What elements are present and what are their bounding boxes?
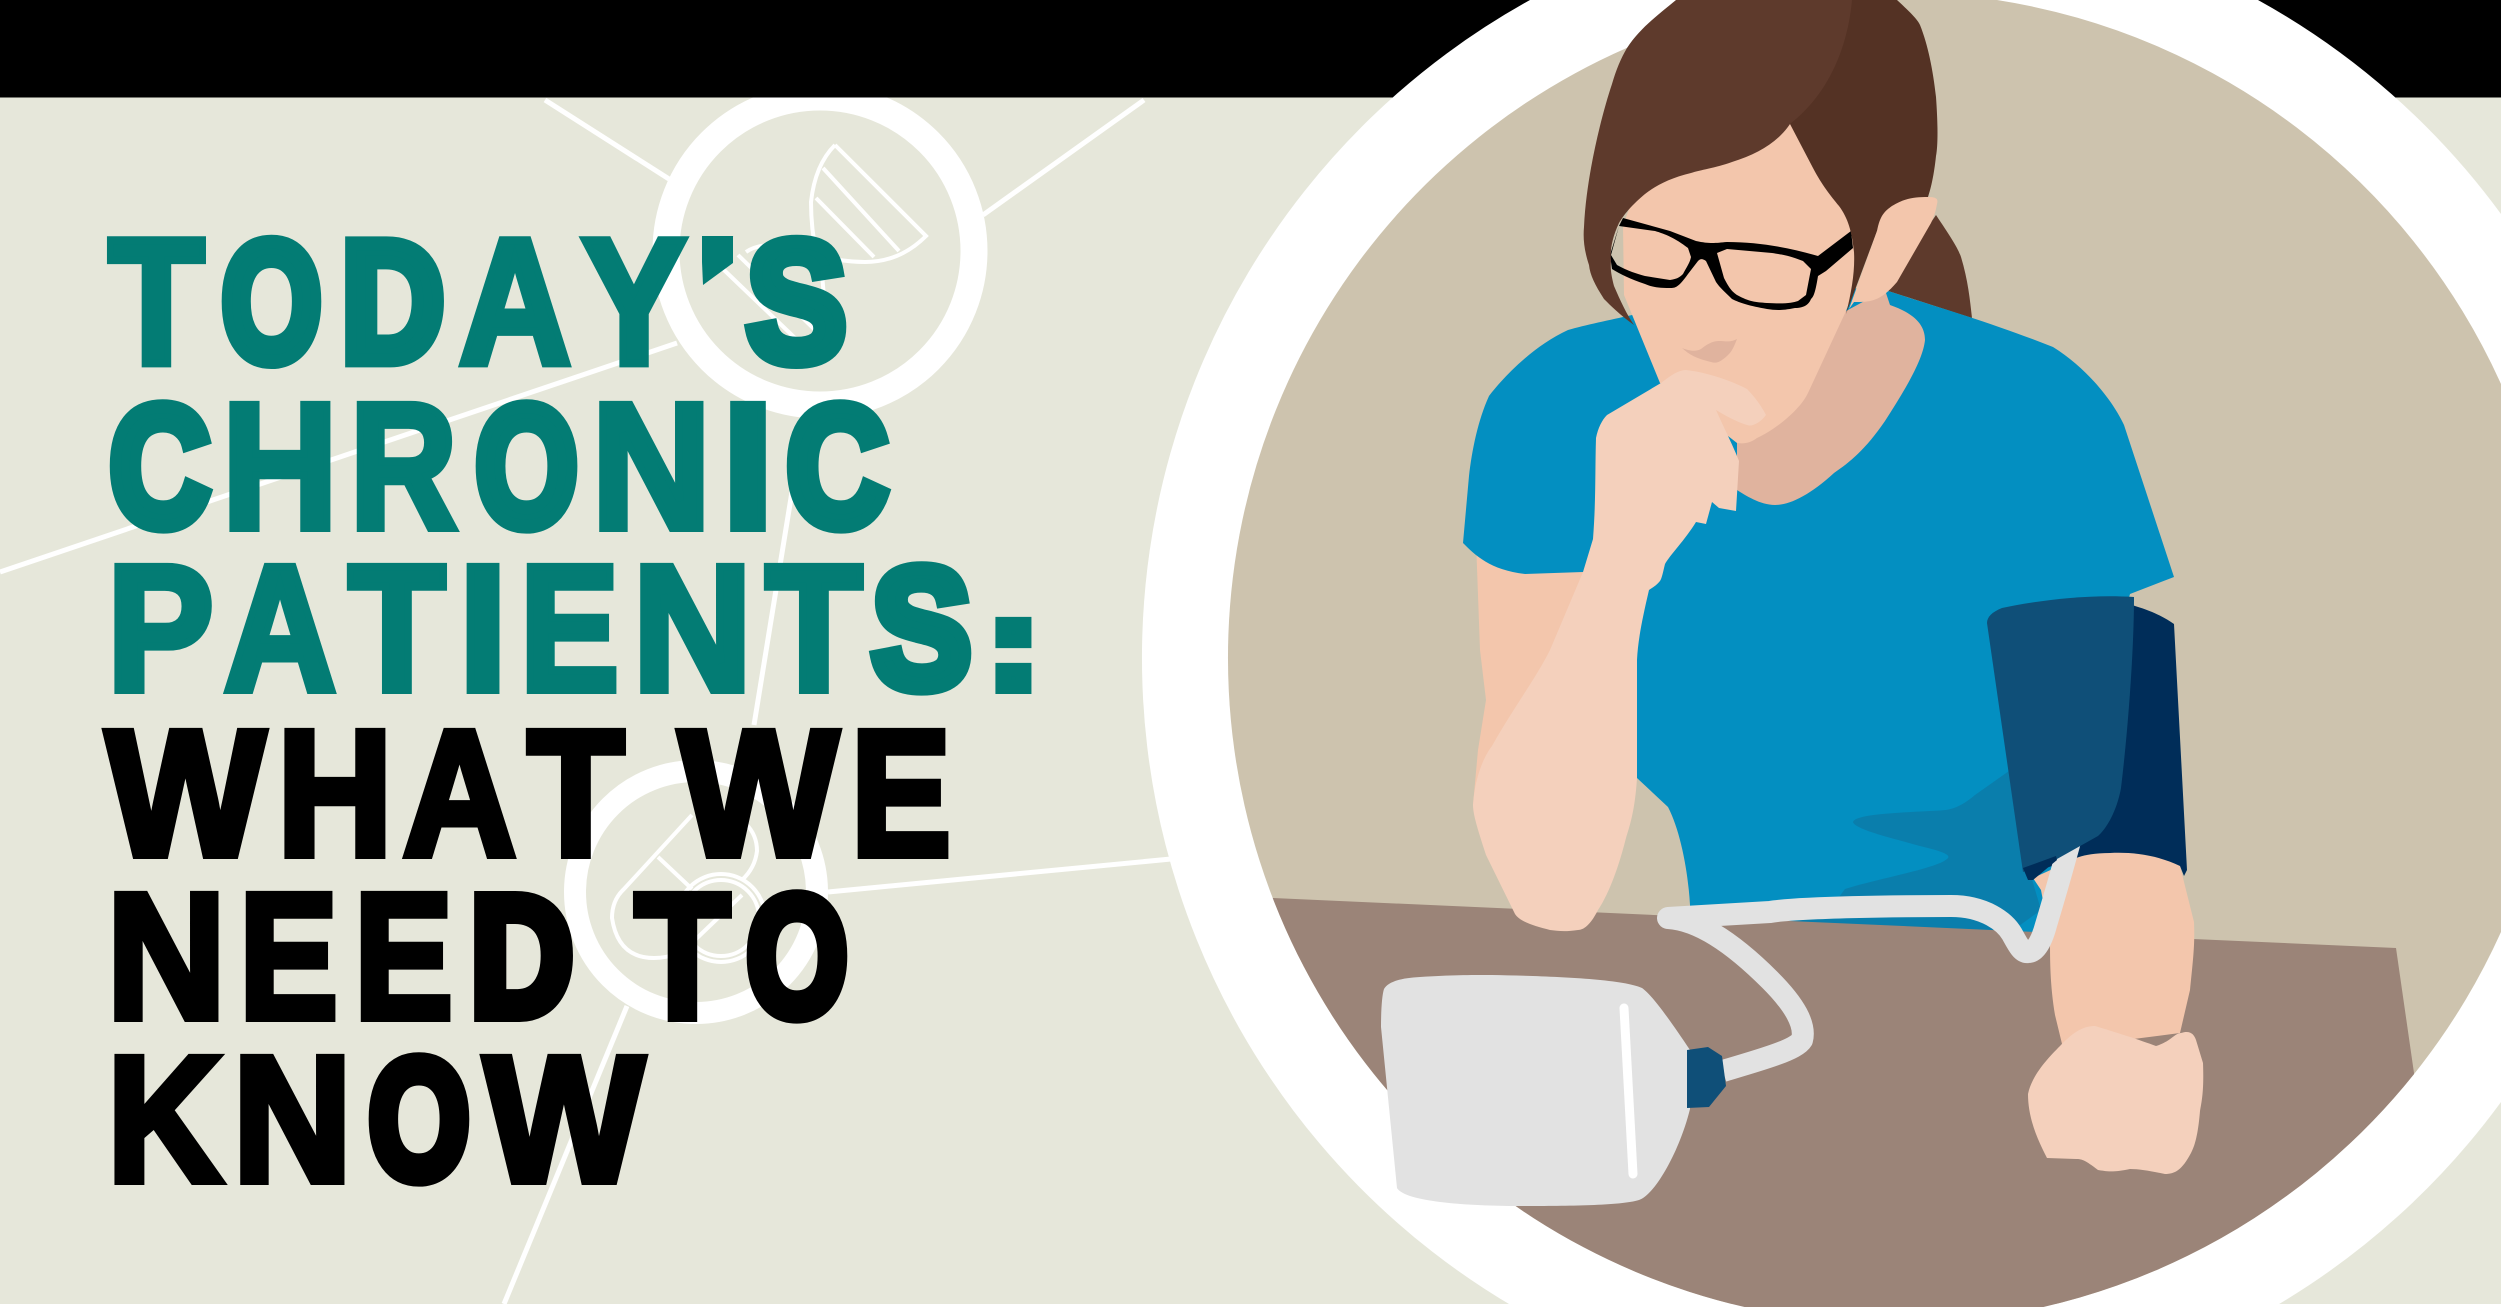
title line: Know: K [107, 1019, 222, 1219]
cuff edge [2023, 856, 2057, 880]
title line: Today's: D [342, 207, 444, 397]
title [106, 201, 1037, 1219]
title line: Chronic: C [787, 372, 888, 562]
title line: Patients: A [224, 528, 336, 728]
title line: What we: H [277, 693, 393, 893]
title line: Today's: ' [702, 223, 733, 312]
table [1200, 890, 2414, 1307]
hair back [1790, 0, 1938, 314]
background line art: medical icons and connectors [0, 97, 1171, 1304]
title line: Today's: O [222, 207, 321, 397]
cuff back [2040, 600, 2187, 876]
hair front [1584, 0, 1852, 325]
title line: Chronic: C [110, 372, 210, 562]
title line: What we: E [851, 693, 951, 893]
title line: Patients: E [520, 528, 619, 728]
title line: What we: W [679, 693, 838, 893]
monitor highlight [1624, 1008, 1633, 1174]
title line: Today's: T [109, 201, 204, 401]
title line: Patients: S [872, 534, 971, 724]
title line: Patients: T [766, 528, 862, 728]
title line: Today's: A [459, 201, 571, 401]
shirt shadow [1775, 771, 2041, 936]
title line: Need to: D [470, 862, 573, 1052]
bottom white edge [0, 1304, 2501, 1307]
left upper arm [1473, 540, 1600, 860]
white circular frame [1142, 0, 2501, 1307]
title line: Know: N [233, 1019, 352, 1219]
ponytail [1885, 215, 1972, 318]
neck [1737, 290, 1925, 505]
monitor body [1381, 975, 1690, 1206]
shirt [1463, 280, 2174, 945]
monitor connector [1687, 1047, 1726, 1108]
tan circle background [1228, 0, 2501, 1307]
blood pressure monitor [1381, 975, 1726, 1206]
title line: Chronic: R [350, 366, 457, 566]
hand on the table [2028, 1026, 2203, 1174]
raised arm and hand at chin [1473, 370, 1766, 931]
title line: Need to: E [354, 856, 453, 1056]
title line: What we: A [403, 693, 516, 893]
title line: What we: T [528, 693, 624, 893]
mouth [1682, 339, 1737, 363]
title line: Today's: Y [582, 201, 686, 401]
title line: Chronic: N [592, 366, 711, 566]
forearm on the table [2033, 852, 2194, 1048]
ear [1849, 197, 1937, 309]
illustration: woman taking blood pressure [1200, 0, 2414, 1307]
title line: Chronic: O [476, 372, 578, 562]
title line: Today's: S [747, 207, 846, 397]
title line: Know: W [484, 1019, 644, 1219]
title line: Need to: E [239, 856, 338, 1056]
title line: Patients: P [107, 528, 214, 728]
top black bar [0, 0, 2501, 98]
tubing [1668, 830, 2073, 952]
title line: Need to: N [107, 856, 226, 1056]
title line: Patients: : [990, 575, 1037, 714]
title line: Know: O [369, 1025, 469, 1215]
title line: Need to: O [747, 862, 847, 1052]
title line: Chronic: I [722, 366, 774, 566]
title line: Patients: N [633, 528, 752, 728]
cuff front [1987, 596, 2134, 872]
title line: Chronic: H [222, 366, 338, 566]
face [1623, 124, 1870, 443]
icon ring: pill [666, 97, 974, 405]
title line: What we: W [106, 693, 265, 893]
title line: Patients: I [459, 528, 507, 728]
title line: Patients: T [349, 528, 445, 728]
icon ring: stethoscope [575, 771, 817, 1013]
title line: Need to: T [635, 856, 730, 1056]
connector lines [0, 100, 1171, 1304]
glasses [1610, 218, 1853, 310]
